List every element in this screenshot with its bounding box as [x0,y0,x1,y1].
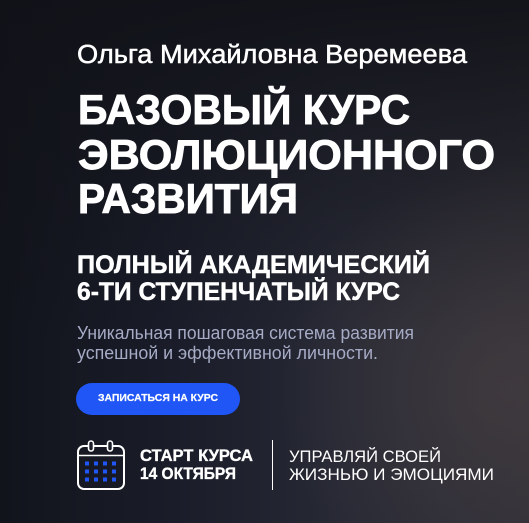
course start date: 14 ОКТЯБРЯ [140,465,236,483]
title: РАЗВИТИЯ [78,175,298,222]
subtitle [77,249,430,306]
divider [272,440,274,490]
author name: Ольга Михайловна Веремеева [77,41,468,69]
title: ЭВОЛЮЦИОННОГО [78,131,495,178]
button: sign up [76,383,240,415]
description [77,323,414,363]
course start date: СТАРТ КУРСА [140,447,253,465]
tagline [289,447,494,484]
description: успешной и эффективной личности. [77,343,378,363]
title [78,85,495,222]
course start date [140,447,253,483]
tagline: УПРАВЛЯЙ СВОЕЙ [289,447,441,466]
tagline: ЖИЗНЬЮ И ЭМОЦИЯМИ [289,465,494,484]
title: БАЗОВЫЙ КУРС [78,85,410,133]
icon: calendar [78,441,124,489]
subtitle: ПОЛНЫЙ АКАДЕМИЧЕСКИЙ [77,249,430,279]
description: Уникальная пошаговая система развития [77,323,414,343]
subtitle: 6-ТИ СТУПЕНЧАТЫЙ КУРС [77,276,400,306]
button: sign up: ЗАПИСАТЬСЯ НА КУРС [98,392,218,404]
